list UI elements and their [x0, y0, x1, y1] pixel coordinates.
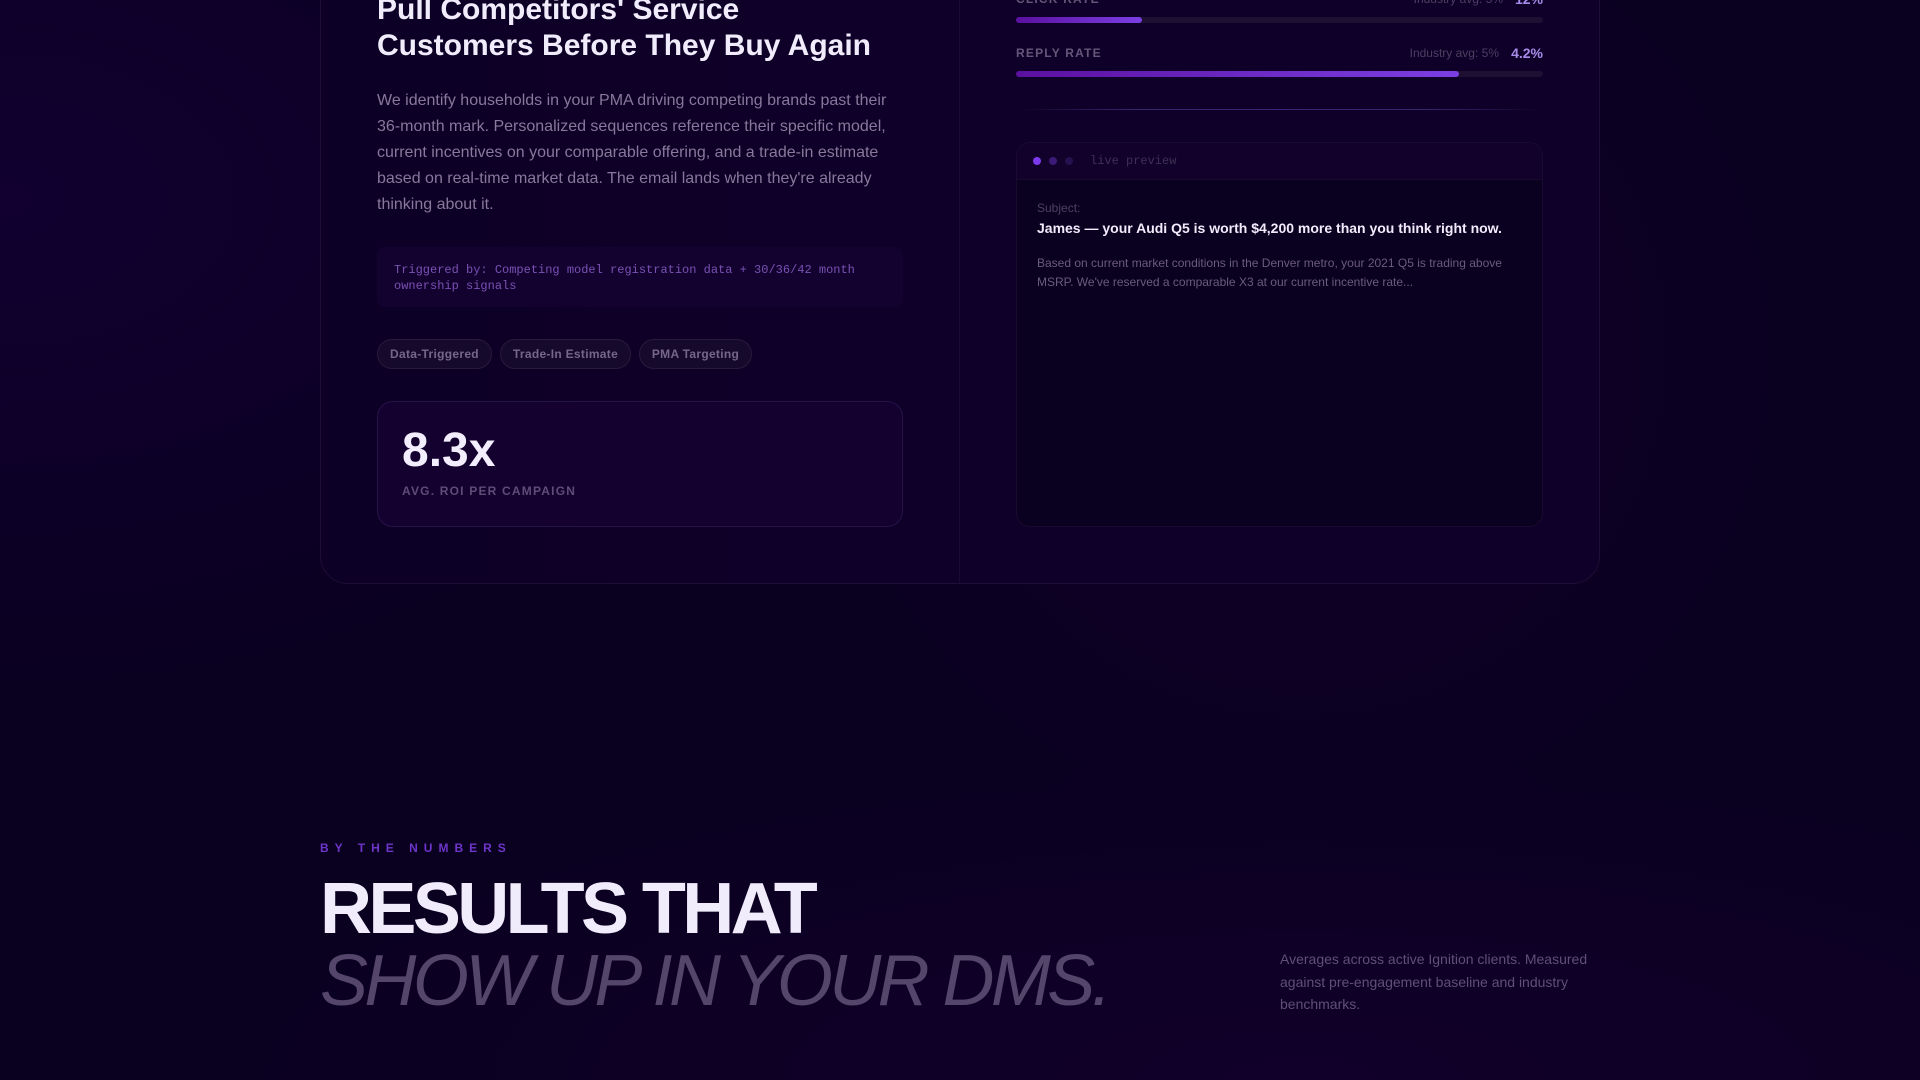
section note: Averages across active Ignition clients. Measured: [1280, 951, 1587, 967]
tag: pma targeting: PMA Targeting: [652, 347, 739, 361]
email subject line: James — your Audi Q5 is worth $4,200 more than you think right now.: [1037, 220, 1502, 236]
section headline: SHOW UP IN YOUR DMS.: [320, 941, 1108, 1021]
section headline: RESULTS THAT: [320, 869, 814, 949]
text block: campaign description: current incentives on your comparable offering, and a trade-in estimate: [377, 144, 878, 161]
heading: campaign title: [377, 0, 871, 62]
panel: email preview: [1016, 142, 1543, 527]
callout: trigger signals: Triggered by: Competing model registration data + 30/36/42 month: [394, 263, 855, 277]
stat value: 8.3x: [402, 424, 495, 477]
reply rate label: REPLY RATE: [1016, 46, 1102, 60]
tag: data-triggered: [377, 339, 492, 369]
column divider: [959, 0, 960, 583]
reply rate benchmark: Industry avg: 5%: [1410, 46, 1499, 60]
heading: campaign title: Customers Before They Buy Again: [377, 29, 871, 62]
tag: data-triggered: Data-Triggered: [390, 347, 479, 361]
text block: campaign description: thinking about it.: [377, 196, 494, 213]
reply rate bar: [1016, 71, 1543, 77]
text block: campaign description: We identify households in your PMA driving competing brands past their: [377, 92, 886, 109]
text block: campaign description: based on real-time market data. The email lands when they're already: [377, 170, 872, 187]
section headline: [320, 869, 1108, 1021]
stat label: AVG. ROI PER CAMPAIGN: [402, 484, 576, 498]
email subject label: Subject:: [1037, 201, 1080, 215]
preview header bar: [1017, 143, 1542, 180]
tag: trade-in estimate: Trade-In Estimate: [513, 347, 618, 361]
email body: Based on current market conditions in the Denver metro, your 2021 Q5 is trading above: [1037, 256, 1502, 270]
text block: campaign description: [377, 92, 886, 213]
section eyebrow: BY THE NUMBERS: [320, 841, 512, 855]
tags row: [377, 339, 752, 369]
tag: trade-in estimate: [500, 339, 631, 369]
section note: [1280, 951, 1587, 1012]
callout: trigger signals: ownership signals: [394, 279, 516, 293]
preview label: live preview: [1090, 154, 1176, 168]
email body: MSRP. We've reserved a comparable X3 at our current incentive rate...: [1037, 275, 1413, 289]
section note: against pre-engagement baseline and industry: [1280, 974, 1568, 990]
click rate bar: [1016, 17, 1543, 23]
icon: window dots: [1033, 157, 1073, 165]
tag: pma targeting: [639, 339, 752, 369]
panel: ROI stat: [377, 401, 903, 527]
metric: click rate: [1016, 0, 1543, 23]
email body: [1037, 256, 1502, 289]
reply rate value: 4.2%: [1511, 45, 1543, 61]
text block: campaign description: 36-month mark. Personalized sequences reference their specific model,: [377, 118, 886, 135]
panel: campaign card: [320, 0, 1600, 584]
section note: benchmarks.: [1280, 996, 1360, 1012]
callout: trigger signals: [377, 247, 903, 307]
metric: reply rate: [1016, 45, 1543, 77]
